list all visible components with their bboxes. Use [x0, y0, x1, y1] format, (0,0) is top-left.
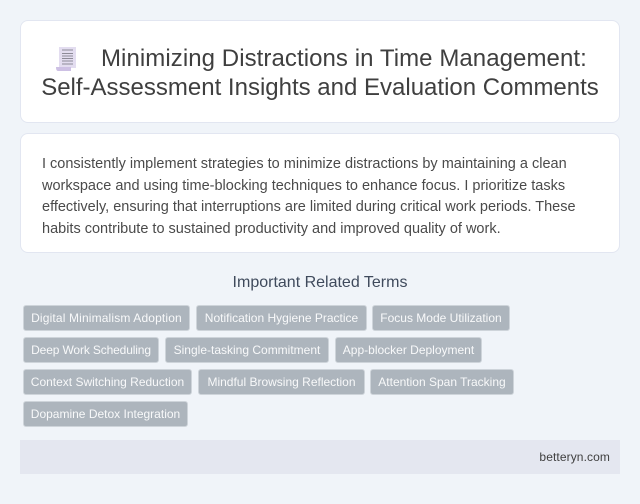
tag: [372, 305, 510, 331]
tag: Deep Work Scheduling: [31, 343, 151, 357]
tag: App-blocker Deployment: [343, 343, 474, 357]
tag: [165, 337, 329, 363]
tag: [23, 337, 159, 363]
tag: Mindful Browsing Reflection: [207, 375, 356, 389]
tag: Focus Mode Utilization: [380, 311, 502, 325]
summary paragraph: [42, 156, 576, 236]
tag: Attention Span Tracking: [378, 375, 506, 389]
tag: Notification Hygiene Practice: [205, 311, 358, 325]
panel: title card: [20, 20, 620, 123]
tag: [196, 305, 367, 331]
tag: [198, 369, 365, 395]
footer site name: betteryn.com: [539, 450, 610, 464]
heading: [41, 45, 599, 101]
icon: document scroll: [56, 47, 76, 71]
tag: Context Switching Reduction: [31, 375, 184, 389]
tag: [23, 369, 192, 395]
tag: Digital Minimalism Adoption: [31, 311, 182, 325]
tag: [23, 401, 188, 427]
heading: Minimizing Distractions in Time Management:: [101, 45, 587, 72]
tag: Dopamine Detox Integration: [31, 407, 180, 421]
summary paragraph: effectively, ensuring that interruptions are limited during critical work periods. These: [42, 199, 576, 215]
tag: Single-tasking Commitment: [174, 343, 320, 357]
summary paragraph: workspace and using time-blocking techniques to enhance focus. I prioritize tasks: [42, 178, 565, 194]
summary paragraph: habits contribute to sustained productivity and improved quality of work.: [42, 220, 501, 236]
section heading: related terms: Important Related Terms: [233, 274, 407, 291]
tag: [370, 369, 514, 395]
panel: summary text card: [20, 133, 620, 253]
tag: [335, 337, 482, 363]
summary paragraph: I consistently implement strategies to minimize distractions by maintaining a clean: [42, 156, 567, 172]
footer bar: [20, 440, 620, 474]
heading: Self-Assessment Insights and Evaluation Comments: [41, 74, 599, 101]
tag: [23, 305, 190, 331]
